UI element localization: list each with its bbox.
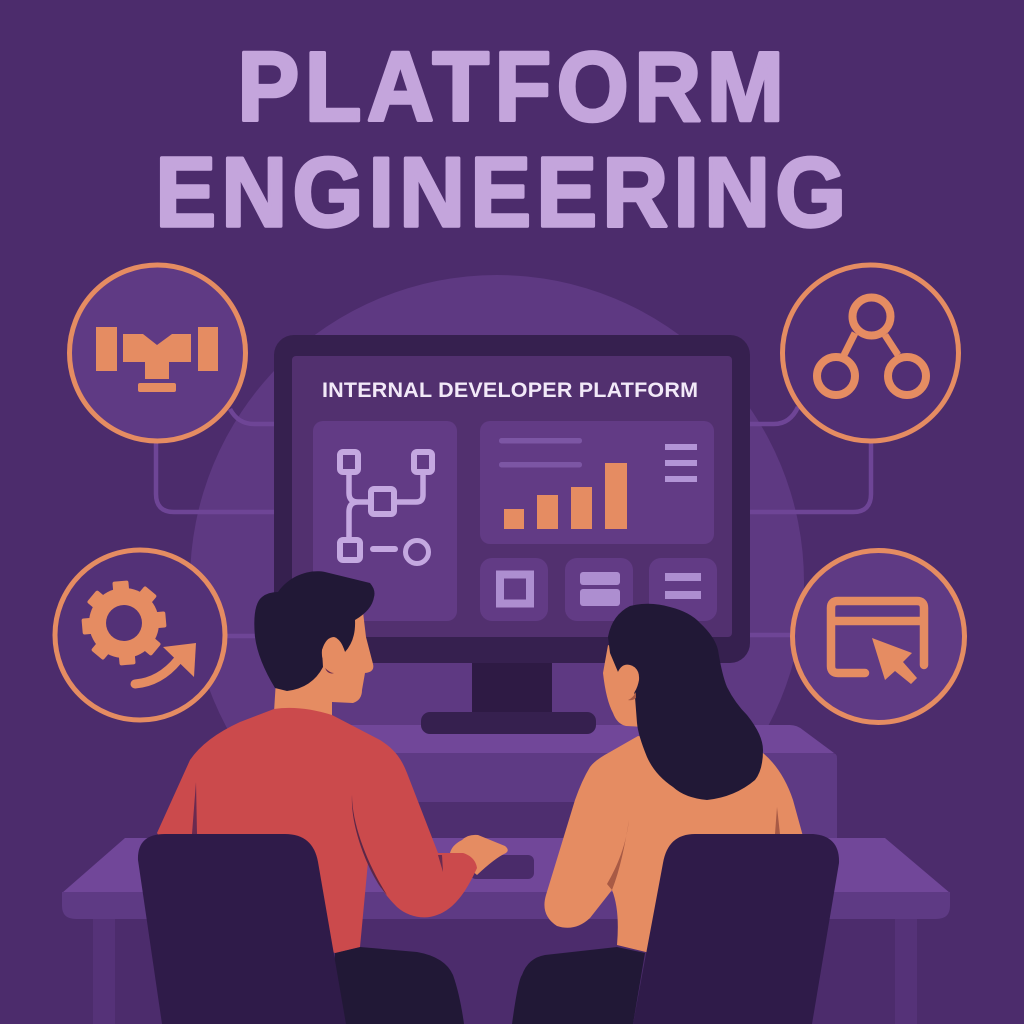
connector lines (156, 407, 871, 636)
chair: right (633, 834, 839, 1024)
icon: pipes (70, 265, 246, 441)
icon: gear with arrow (55, 550, 225, 720)
monitor (274, 335, 750, 734)
title (156, 32, 852, 247)
front desk (62, 838, 950, 1024)
background circle (190, 275, 804, 889)
person: man (157, 571, 508, 1024)
title: ENGINEERING (156, 137, 852, 247)
chair: left (138, 834, 346, 1024)
icon: nodes (782, 265, 958, 441)
workflow panel (313, 421, 457, 621)
icon: browser with cursor (792, 550, 964, 722)
title: PLATFORM (238, 32, 790, 142)
person: woman (512, 604, 804, 1024)
back desk (300, 725, 837, 840)
small tiles (480, 558, 717, 621)
screen heading: INTERNAL DEVELOPER PLATFORM (322, 378, 698, 402)
bar chart panel (480, 421, 714, 544)
